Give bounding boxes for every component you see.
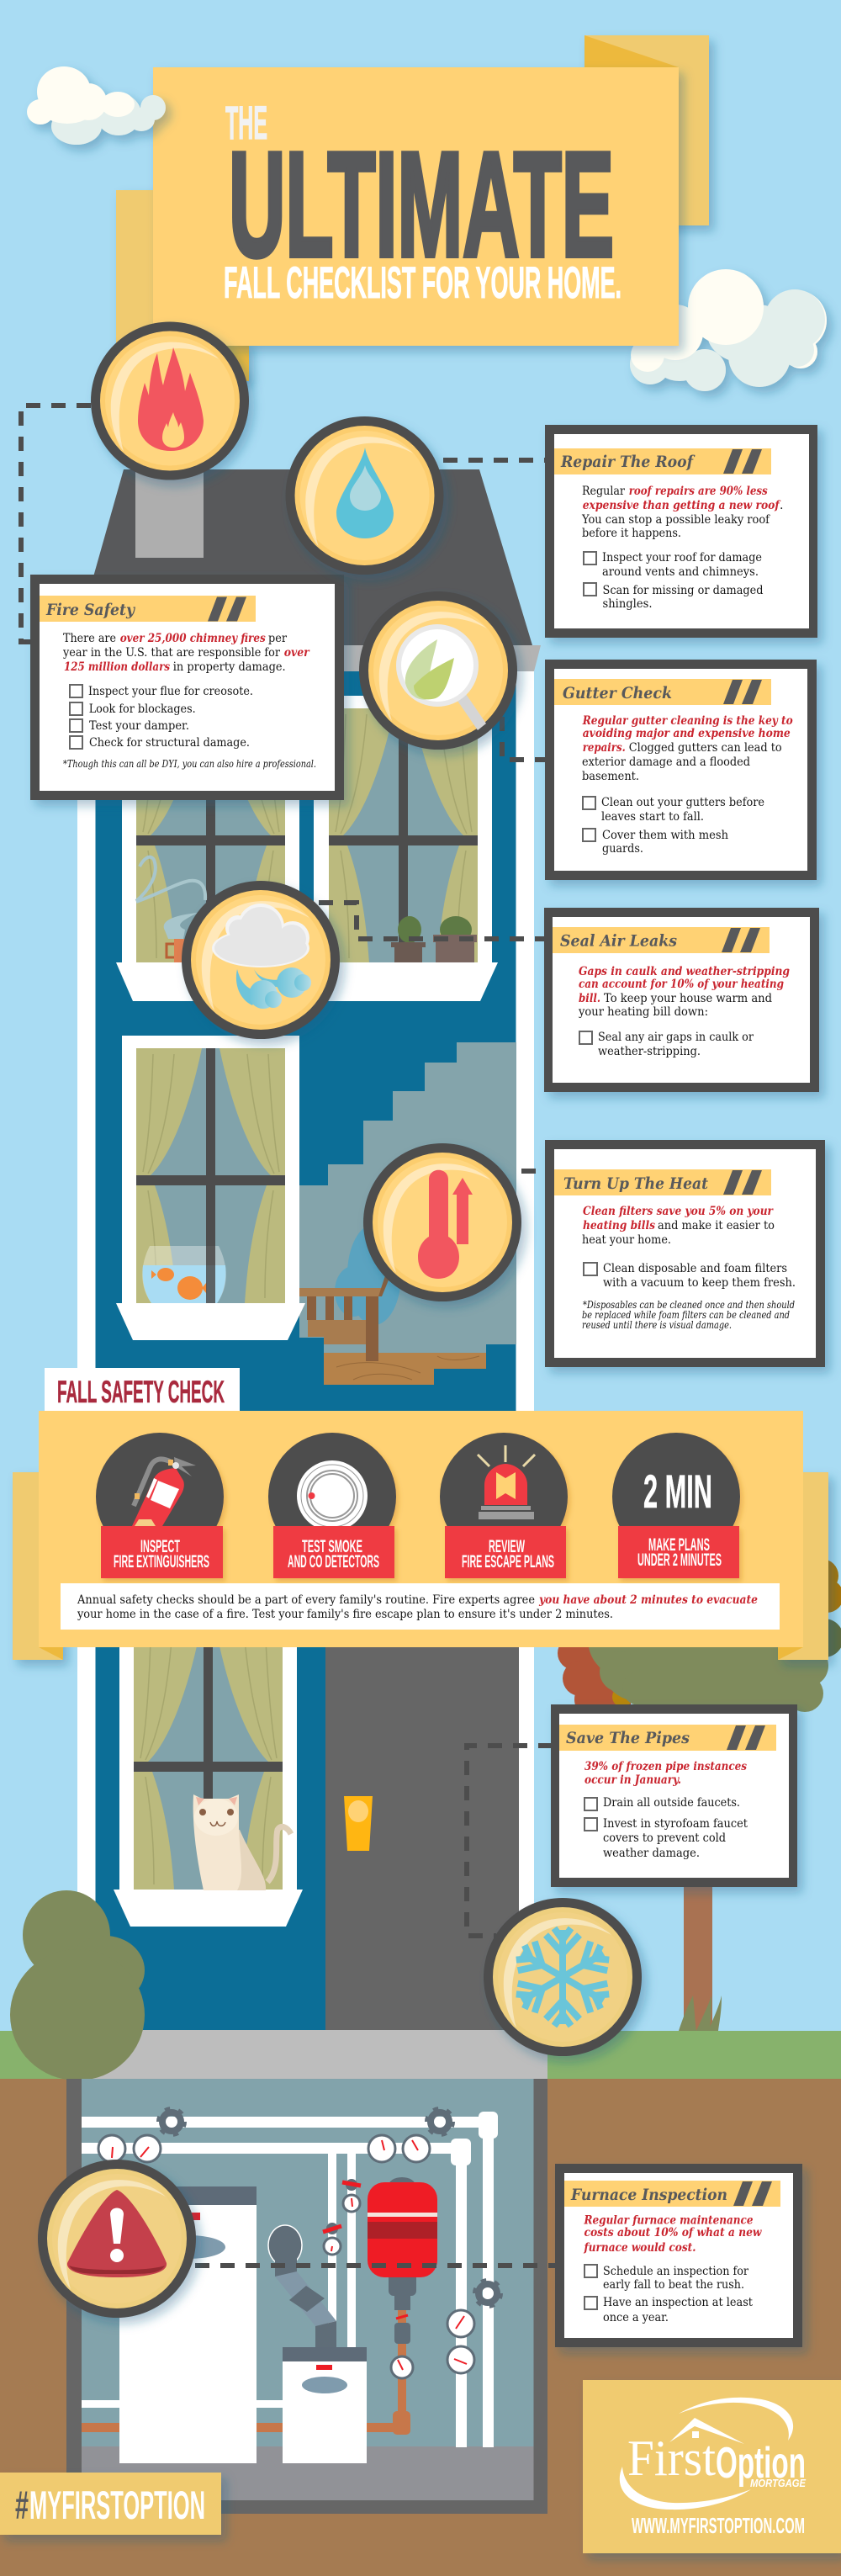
logo box: First [627,2430,716,2486]
panel: turn up the heat: be replaced while foam filters can be cleaned and [582,1308,790,1321]
panel: furnace inspection: costs about 10% of what a new [584,2226,762,2239]
icon: cat [193,1794,291,1890]
panel: seal air leaks: bill. [579,992,600,1005]
title banner [153,67,679,346]
house: roof [74,469,532,645]
panel: fire safety: 125 million dollars [64,660,170,674]
window: upper right [314,696,492,963]
panel: gutter check: Gutter Check [563,684,672,702]
cloud: right [630,269,827,391]
house: chimney [135,454,204,558]
expansion tank [368,2177,437,2435]
panel: save the pipes: Save The Pipes [566,1729,690,1747]
panel: fire safety: Inspect your flue for creosote. [88,685,253,698]
safety section: back ribbons [13,1472,828,1660]
safety text block: Annual safety checks should be a part of every family's routine. Fire experts agree [77,1593,535,1607]
item: test smoke and co detectors: AND CO DETECTORS [288,1551,379,1572]
icon: fire [91,321,249,480]
banner back ribbon left [116,190,249,384]
ground: grass and soil [0,2031,841,2576]
panel: seal air leaks: weather-stripping. [598,1045,701,1058]
icon: cloud and wind [182,881,340,1039]
panel: furnace inspection: furnace would cost. [584,2241,696,2255]
panel: gutter check: Cover them with mesh [602,829,728,842]
window: upper left [122,698,299,963]
connector lines [21,405,555,2266]
tab: fall safety check: FALL SAFETY CHECK [57,1375,225,1409]
panel: repair the roof: roof repairs are 90% less [629,485,768,498]
panel: furnace inspection: Schedule an inspection for [603,2265,748,2278]
banner back ribbon right [584,35,709,225]
panel: repair the roof: Scan for missing or damaged [602,584,764,597]
panel: turn up the heat: and make it easier to [658,1219,775,1232]
item: make plans under 2 minutes: UNDER 2 MINUTES [637,1550,722,1570]
panel: repair the roof: Repair The Roof [560,453,696,471]
panel: furnace inspection: once a year. [603,2311,669,2324]
panel: gutter check: Clogged gutters can lead to [629,741,782,755]
panel: gutter check: Regular gutter cleaning is the key to [582,714,793,728]
panel: gutter check: avoiding major and expensive home [583,727,791,740]
panel: fire safety: over 25,000 chimney fires [120,632,266,645]
panel: fire safety: There are [63,632,116,645]
panel: save the pipes [551,1704,797,1887]
bush [10,1890,145,2080]
panel: fire safety: *Though this can all be DYI, you can also hire a professional. [63,757,316,770]
icon: magnifier and leaf [359,591,517,750]
panel: save the pipes: 39% of frozen pipe instances [584,1760,747,1773]
panel: seal air leaks: Gaps in caulk and weather-stripping [579,965,790,978]
door handle [344,1796,373,1851]
panel: gutter check: exterior damage and a flooded [582,755,750,769]
item: test smoke and co detectors [268,1433,396,1578]
panel: furnace inspection: early fall to beat the rush. [603,2278,744,2292]
furnace: small [283,2347,367,2463]
panel: gutter check: basement. [582,770,639,783]
cloud: left [27,66,166,145]
panel: turn up the heat: Clean disposable and foam filters [603,1262,787,1275]
panel: seal air leaks: can account for 10% of your heating [579,978,784,991]
panel: repair the roof: You can stop a possible leaky roof [581,513,771,527]
item: review fire escape plans: REVIEW [489,1536,525,1556]
panel: save the pipes: occur in January. [584,1773,681,1787]
panel: save the pipes: Drain all outside faucets. [603,1796,740,1810]
panel: repair the roof: . [780,499,783,512]
icon: water drop [286,416,444,575]
panel: furnace inspection: Furnace Inspection [570,2186,727,2204]
panel: turn up the heat: with a vacuum to keep them fresh. [603,1276,796,1290]
panel: fire safety: per [268,632,287,645]
panel: seal air leaks: your heating bill down: [578,1005,708,1019]
tree [558,1559,841,2032]
item: make plans under 2 minutes [612,1433,740,1578]
panel: turn up the heat: Clean filters save you 5% on your [583,1205,774,1218]
hashtag box: MYFIRSTOPTION [29,2483,205,2527]
panel: fire safety: year in the U.S. that are responsible for [62,646,280,660]
item: inspect fire extinguishers: INSPECT [140,1536,180,1556]
item: inspect fire extinguishers [96,1433,224,1578]
icon: fish bowl [142,1246,226,1303]
window: lower left [122,1036,299,1303]
item: inspect fire extinguishers: FIRE EXTINGUISHERS [114,1551,209,1572]
panel: repair the roof: around vents and chimneys. [602,565,759,579]
logo box: MORTGAGE [750,2477,806,2489]
tab: fall safety check [45,1368,240,1412]
panel: gutter check: Clean out your gutters before [601,796,764,809]
panel: repair the roof: before it happens. [582,527,681,540]
pressure gauges [98,2135,474,2378]
house: gutter [74,645,541,671]
panel: fire safety: Check for structural damage. [89,736,250,750]
panel: seal air leaks: Seal any air gaps in caulk or [598,1031,754,1044]
furnace: large [119,2186,257,2463]
icon: snowflake [484,1898,642,2056]
panel: turn up the heat: heat your home. [582,1233,671,1247]
panel: fire safety: Fire Safety [45,601,136,619]
safety text block: you have about 2 minutes to evacuate [538,1593,758,1607]
hashtag box: # [15,2483,29,2527]
panel: turn up the heat: reused until there is visual damage. [582,1318,732,1331]
panel: seal air leaks: To keep your house warm and [604,992,772,1005]
panel: turn up the heat [545,1140,825,1367]
item: make plans under 2 minutes: MAKE PLANS [648,1534,710,1555]
item: test smoke and co detectors: TEST SMOKE [302,1536,362,1556]
panel: save the pipes: covers to prevent cold [603,1831,726,1845]
panel: turn up the heat: heating bills [583,1219,655,1232]
item: review fire escape plans [440,1433,568,1578]
item: make plans under 2 minutes: 2 MIN [643,1465,712,1518]
porch [88,2030,547,2079]
panel: seal air leaks [544,908,819,1092]
safety text block: your home in the case of a fire. Test your family's fire escape plan to ensure it's under 2 minutes. [77,1608,613,1621]
panel: repair the roof [545,425,817,638]
stair railing [299,1270,392,1361]
window: ground floor with cat [114,1635,303,1927]
panel: furnace inspection: Regular furnace maintenance [584,2214,754,2228]
logo box [583,2380,841,2553]
panel: save the pipes: Invest in styrofoam faucet [603,1817,748,1831]
wood floor [324,1353,486,1385]
panel: fire safety: Test your damper. [89,719,189,733]
panel: turn up the heat: Turn Up The Heat [563,1174,708,1193]
panel: repair the roof: expensive than getting a new roof [583,499,781,512]
icon: thermometer [363,1143,521,1301]
item: review fire escape plans: FIRE ESCAPE PLANS [462,1551,554,1572]
panel: seal air leaks: Seal Air Leaks [560,932,677,951]
house: walls [77,671,534,2030]
safety text block [61,1583,780,1630]
gears [159,2109,500,2306]
panel: repair the roof: Inspect your roof for damage [602,551,762,564]
stairs [299,1042,516,1353]
panel: fire safety: over [284,646,310,660]
panel: furnace inspection: Have an inspection at least [603,2296,753,2309]
panel: gutter check: guards. [602,842,643,856]
window sill: lower [116,1303,305,1340]
window sill: upper [116,962,498,1001]
title: THE [225,96,267,149]
panel: repair the roof: shingles. [602,597,653,611]
panel: fire safety: Look for blockages. [89,702,196,716]
panel: save the pipes: weather damage. [603,1847,700,1860]
panel: fall safety check [39,1411,803,1647]
panel: gutter check: leaves start to fall. [601,810,704,824]
panel: furnace inspection [555,2164,802,2347]
icon: alert [38,2160,196,2318]
red valves [323,2179,361,2234]
furnace flue [268,2225,336,2347]
title [224,96,621,308]
panel: fire safety: in property damage. [173,660,286,674]
panel: repair the roof: Regular [582,485,625,498]
panel: fire safety [30,575,344,800]
hashtag box [0,2473,221,2535]
panel: gutter check [545,660,817,880]
panel: gutter check: repairs. [583,741,626,755]
basement [66,2079,547,2514]
